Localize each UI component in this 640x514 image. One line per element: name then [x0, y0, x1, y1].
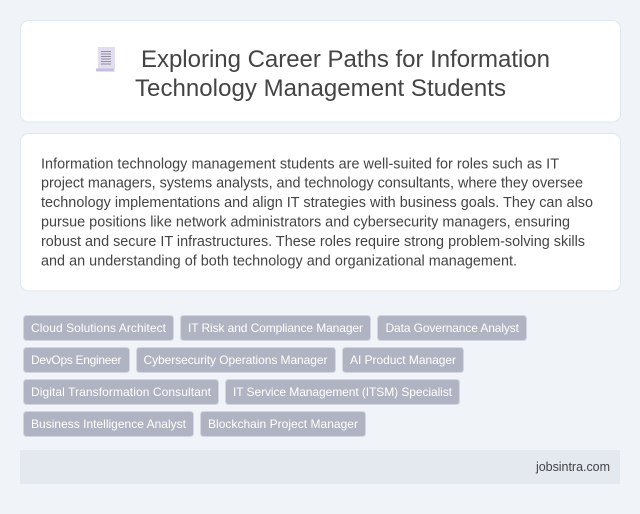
tag: AI Product Manager [350, 353, 456, 367]
title: Exploring Career Paths for Information [141, 46, 550, 73]
title [135, 46, 550, 102]
tag: IT Service Management (ITSM) Specialist [233, 385, 453, 399]
panel: description: pursue positions like network administrators and cybersecurity managers, ensuring [41, 215, 570, 231]
tag: Cloud Solutions Architect [31, 321, 167, 335]
tag: Blockchain Project Manager [208, 417, 358, 431]
tag [342, 348, 464, 372]
panel: description [20, 134, 620, 291]
tag [200, 412, 366, 436]
title: Technology Management Students [135, 75, 506, 102]
tag [378, 316, 526, 340]
panel: description: Information technology management students are well-suited for roles such as IT [41, 156, 559, 172]
tag: DevOps Engineer [31, 353, 122, 367]
footer [20, 450, 620, 484]
tag: Digital Transformation Consultant [31, 385, 212, 399]
panel: description: robust and secure IT infrastructures. These roles require strong problem-solving skills [41, 234, 585, 250]
tag [24, 380, 218, 404]
tag [226, 380, 460, 404]
tag: Business Intelligence Analyst [31, 417, 187, 431]
tag list [24, 316, 526, 436]
panel: header [20, 20, 620, 122]
panel: description: project managers, systems analysts, and technology consultants, where they oversee [41, 176, 583, 192]
tag: Cybersecurity Operations Manager [144, 353, 328, 367]
tag [136, 348, 336, 372]
tag [180, 316, 370, 340]
tag [24, 316, 174, 340]
tag: Data Governance Analyst [386, 321, 520, 335]
tag: IT Risk and Compliance Manager [188, 321, 363, 335]
tag [24, 348, 130, 372]
panel: description: technology implementations and align IT strategies with business goals. They can also [41, 195, 593, 211]
panel: description: and an understanding of both technology and organizational management. [41, 253, 517, 269]
footer: jobsintra.com [535, 460, 610, 474]
icon: document scroll [96, 47, 115, 72]
tag [24, 412, 194, 436]
